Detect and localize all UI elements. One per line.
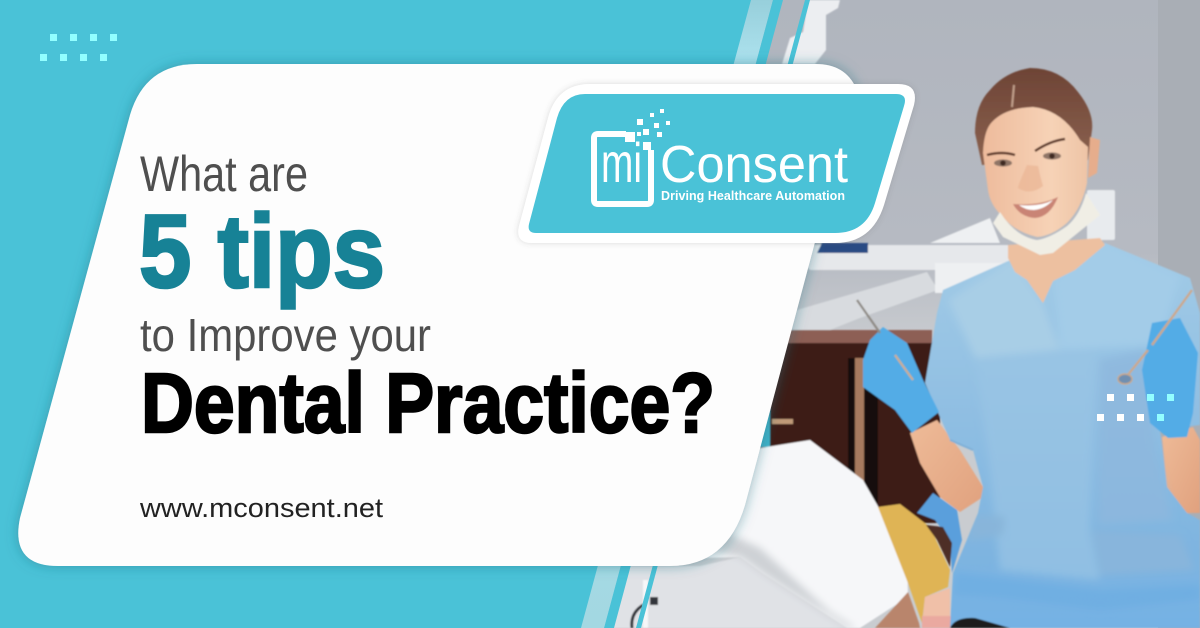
dentist forearm behind shirt [875,592,920,628]
nurse arms [910,420,1200,513]
dental equipment tray and arm [780,190,1115,350]
logo text: Consent: Consent [660,136,849,194]
logo badge [518,84,915,243]
dental lamp arm [782,0,840,64]
nurse sleeve seam [950,440,973,450]
panel: white title card [18,64,856,566]
nurse ear [1088,137,1100,178]
patient skin [923,588,950,617]
patient hair [926,525,952,567]
chair cable details [632,580,658,628]
badge teal fill [529,94,905,233]
nurse hair [975,68,1092,165]
scrub soft shading [952,268,1192,595]
nurse scrubs [925,243,1200,628]
title line: to Improve your: to Improve your [140,309,431,361]
icon: tablet with pixels [594,109,670,204]
logo tagline: Driving Healthcare Automation [661,189,845,203]
title line: What are: What are [140,146,308,202]
left hand glove [863,327,939,433]
patient yellow shirt [878,504,950,623]
right hand glove [1142,318,1198,438]
nurse eyes [994,152,1061,167]
nurse neck [1008,238,1105,303]
logo text: mi: mi [601,131,642,194]
nurse [857,68,1200,628]
shirt shadow fold [715,532,855,628]
nurse eyebrows [987,139,1065,155]
title line: Dental Practice?: Dental Practice? [141,356,715,450]
left dental instrument [857,300,913,380]
patient white shirt [700,440,908,628]
dental chair [603,557,847,628]
hair part [1012,85,1014,107]
patient blue cap [917,493,962,573]
decorative dots: top left [40,34,117,61]
title line: 5 tips: 5 tips [139,194,385,310]
website url: www.mconsent.net [139,493,384,523]
right dental instrument [1118,290,1192,384]
wooden cabinet [758,330,940,523]
badge white outline [518,84,915,243]
nurse black trousers [950,618,1010,628]
nurse nose [1018,165,1043,192]
diagonal accent stripes [581,0,810,628]
nurse smile [1013,197,1058,218]
decorative dots: lower right [1097,394,1174,421]
surgical mask under chin [993,193,1100,255]
photo: dentist with patient [560,0,1200,628]
patient pink garment [922,616,952,628]
nurse face [983,107,1088,237]
